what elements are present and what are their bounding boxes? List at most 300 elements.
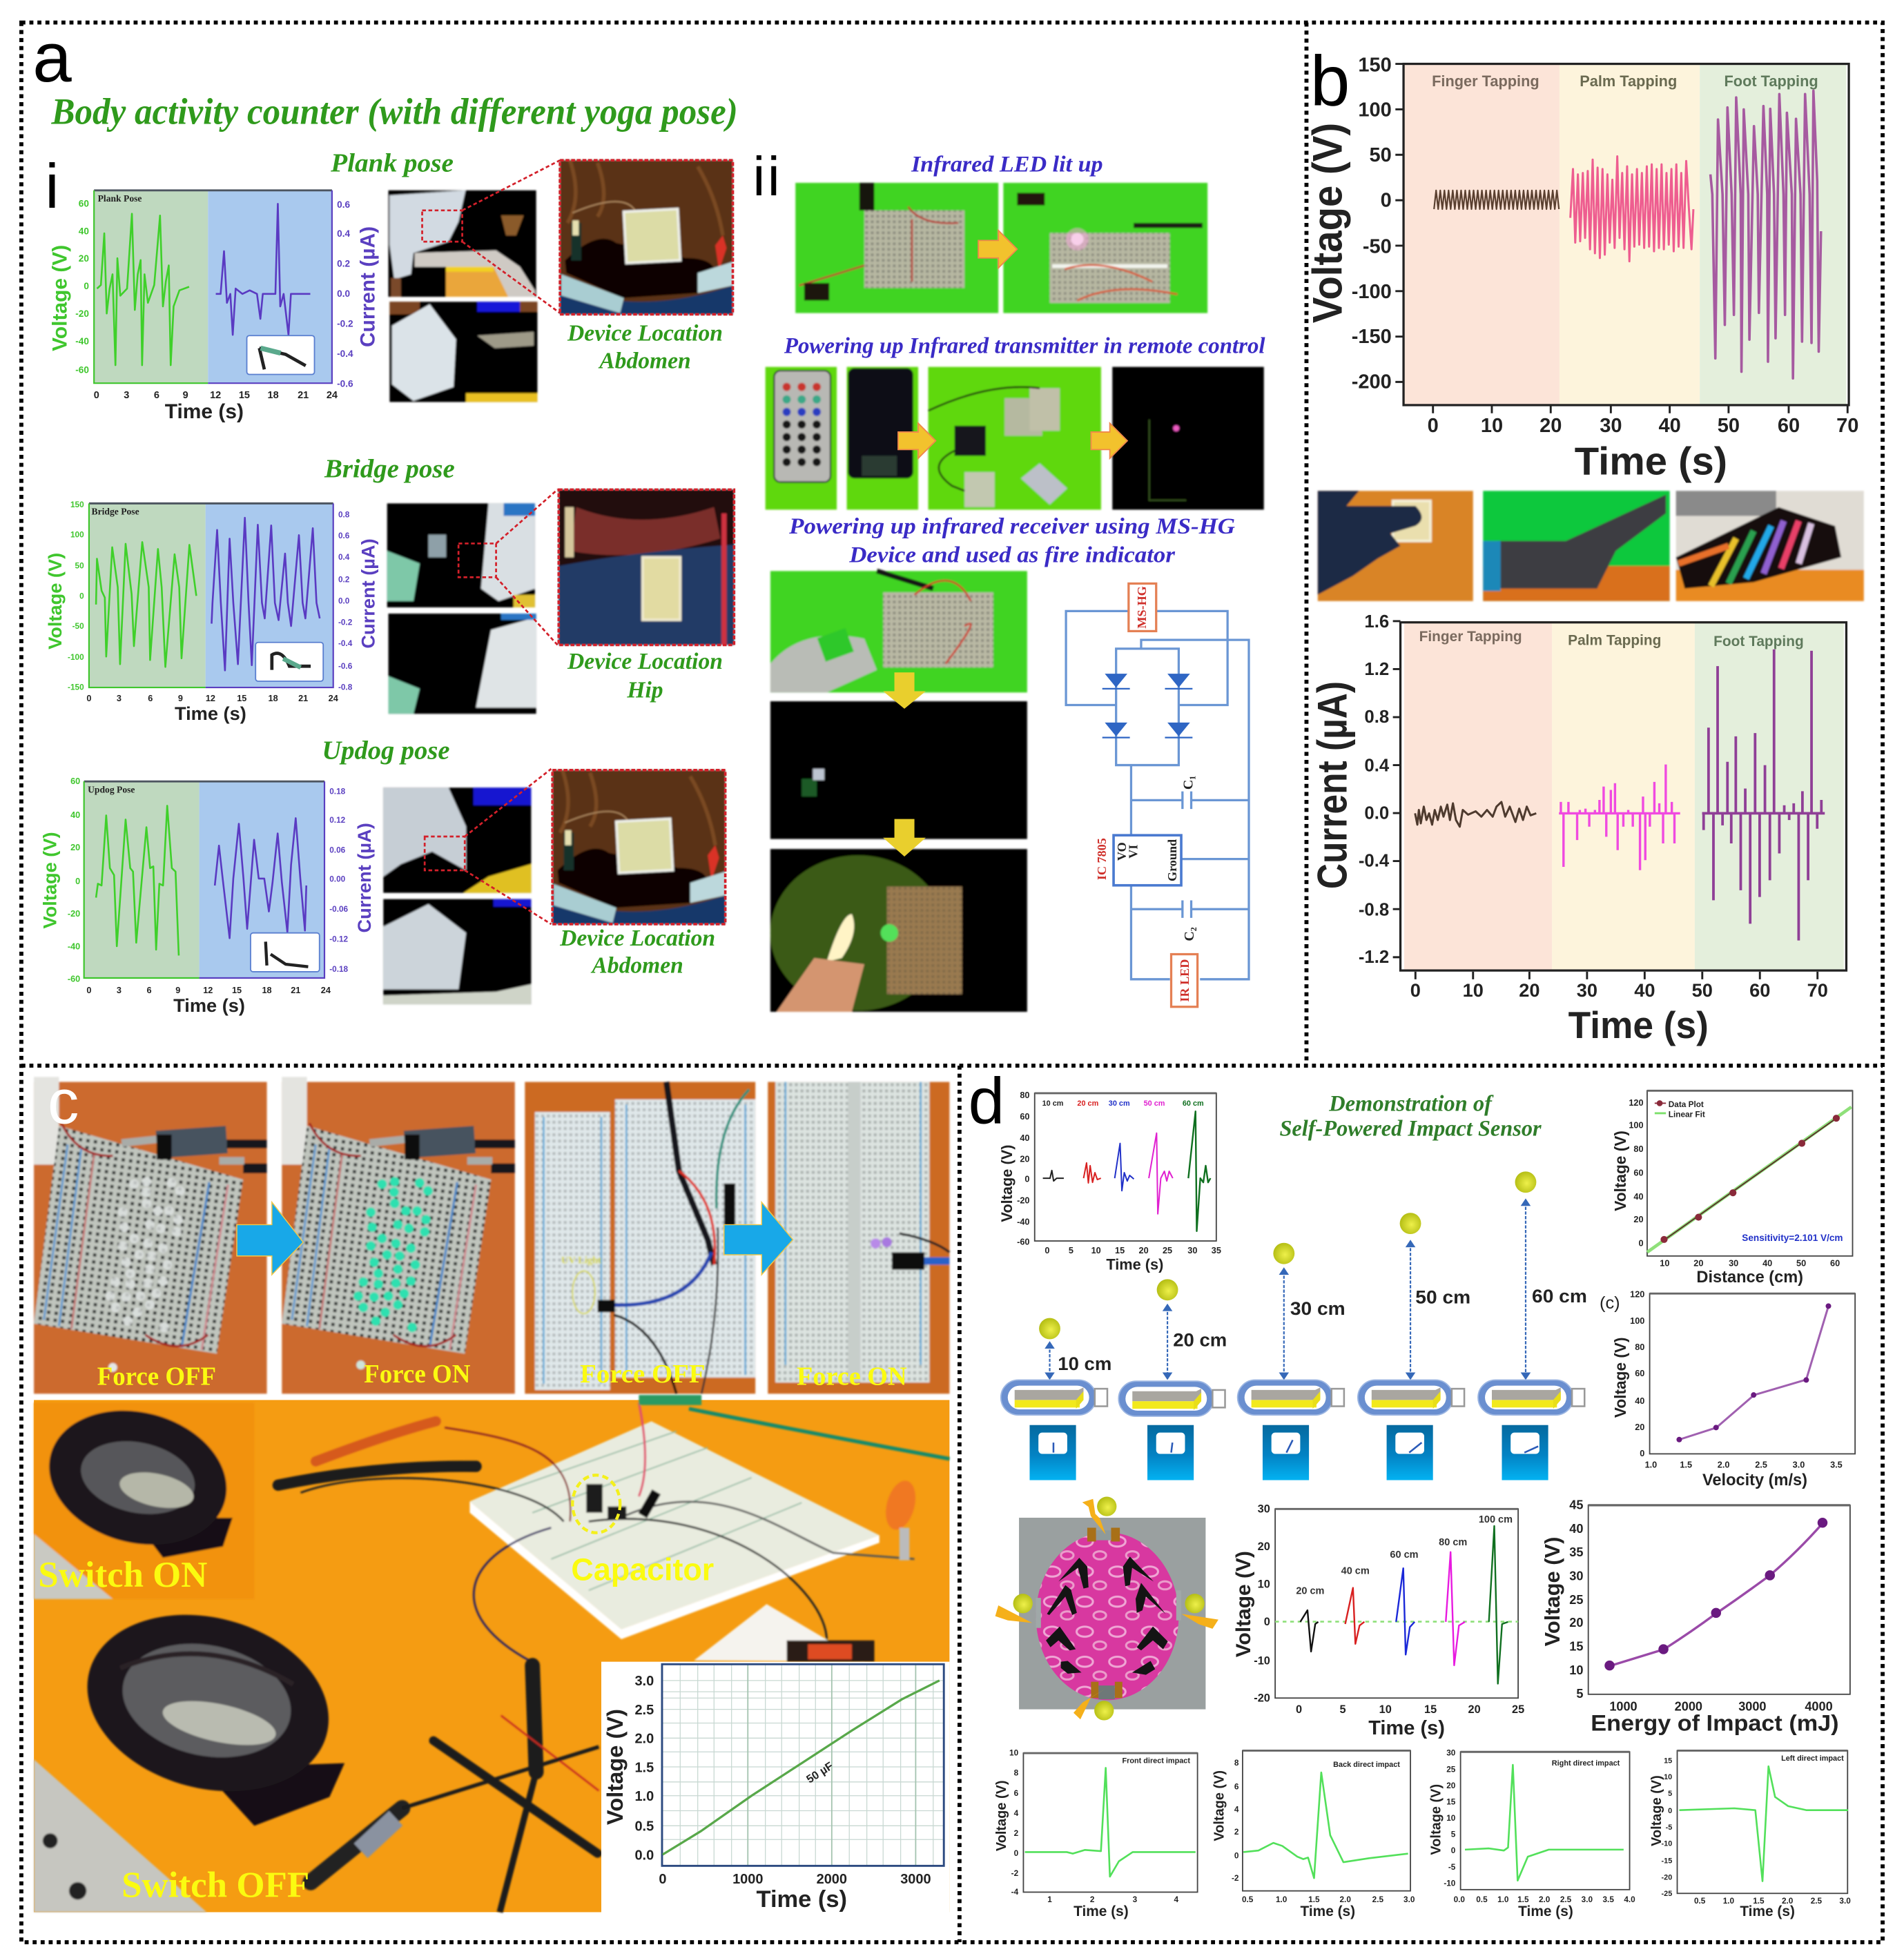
bridge photos	[387, 503, 536, 714]
distance voltage chart: Linear Fit	[1669, 1110, 1705, 1119]
updog chart: -0.06	[329, 905, 349, 914]
distance voltage chart: Distance (cm)	[1696, 1268, 1803, 1286]
impact balls	[1013, 1496, 1205, 1721]
bridge chart: -0.2	[338, 618, 353, 627]
plank photos	[389, 190, 537, 402]
drop voltage chart: 0	[1024, 1175, 1029, 1184]
plank chart: 15	[239, 390, 250, 401]
label a: a	[32, 18, 72, 97]
updog chart: 3	[117, 986, 122, 995]
updog chart: 0.06	[329, 846, 346, 855]
drop voltage chart: 20 cm	[1077, 1099, 1098, 1108]
updog chart: 0.00	[329, 874, 346, 883]
helmet drop chart: 10	[1379, 1703, 1392, 1716]
distance voltage chart: 80	[1633, 1144, 1644, 1154]
front impact chart: 1	[1047, 1895, 1052, 1904]
updog chart: 15	[232, 986, 242, 995]
helmet drop chart: 0	[1264, 1616, 1270, 1628]
distance voltage chart: Voltage (V)	[1611, 1131, 1629, 1211]
meters	[1029, 1425, 1548, 1480]
left impact chart: Voltage (V)	[1649, 1775, 1664, 1846]
back impact chart: 2.0	[1340, 1895, 1351, 1904]
plank heading: Plank pose	[330, 149, 454, 178]
front impact chart: 3	[1133, 1895, 1138, 1904]
helmet drop chart: 100 cm	[1479, 1514, 1513, 1525]
velocity voltage chart: 100	[1630, 1316, 1644, 1326]
front impact chart: Front direct impact	[1122, 1757, 1190, 1766]
drop voltage chart: 60 cm	[1183, 1099, 1204, 1108]
velocity voltage chart: 40	[1635, 1396, 1644, 1406]
drop voltage chart: -40	[1017, 1217, 1029, 1226]
circuit labels: Ground	[1165, 839, 1179, 881]
velocity voltage chart: 1.5	[1680, 1460, 1692, 1469]
height labels: 20 cm	[1173, 1329, 1227, 1350]
plank chart: 40	[79, 226, 89, 236]
tapping photos	[1318, 491, 1864, 601]
energy voltage chart: 20	[1569, 1616, 1583, 1630]
drop voltage chart: -20	[1017, 1196, 1029, 1206]
right impact chart: 2.5	[1560, 1895, 1572, 1904]
voltage chart: 100	[1358, 99, 1392, 121]
current chart: 10	[1463, 979, 1484, 1001]
plank chart: 9	[183, 390, 188, 401]
current chart: Time (s)	[1568, 1004, 1709, 1046]
force labels: Force ON	[364, 1360, 471, 1389]
ball 20 cm	[1157, 1279, 1178, 1300]
drop voltage chart: 80	[1020, 1091, 1029, 1100]
left impact chart: 5	[1668, 1790, 1672, 1798]
bridge chart: -0.8	[338, 683, 353, 692]
right impact chart: 5	[1451, 1830, 1456, 1839]
updog chart: 20	[70, 843, 80, 852]
plank chart: -40	[75, 336, 89, 346]
updog chart: 12	[203, 986, 213, 995]
heading: IR receiver: Powering up infrared receiver using MS-HG	[788, 514, 1235, 539]
current chart: 0.0	[1364, 804, 1389, 823]
height labels: 60 cm	[1532, 1285, 1587, 1307]
height labels: 30 cm	[1290, 1298, 1346, 1319]
back impact chart: 1.5	[1308, 1895, 1320, 1904]
plank chart: -20	[75, 309, 89, 319]
velocity voltage chart: 120	[1630, 1290, 1644, 1300]
back impact chart: 8	[1234, 1759, 1239, 1768]
bridge chart: 3	[117, 694, 122, 703]
energy voltage chart: 15	[1569, 1639, 1583, 1653]
force labels	[97, 1360, 907, 1391]
velocity voltage chart: 80	[1635, 1342, 1644, 1352]
updog chart: Updog Pose	[88, 784, 135, 794]
heading: IR transmitter: Powering up Infrared transmitter in remote control	[784, 334, 1266, 359]
plank chart: 3	[124, 390, 129, 401]
updog chart: 24	[321, 986, 331, 995]
height labels: 50 cm	[1415, 1287, 1470, 1308]
bridge chart: 9	[178, 694, 183, 703]
bridge chart	[44, 500, 379, 724]
plank pose row	[48, 149, 732, 423]
distance voltage chart: 60	[1633, 1168, 1644, 1178]
energy voltage chart: 4000	[1805, 1699, 1833, 1713]
drop test schematic	[1001, 1171, 1587, 1480]
helmet drop chart: 25	[1512, 1703, 1524, 1716]
back impact chart: 6	[1234, 1783, 1239, 1792]
drop voltage chart: 60	[1020, 1112, 1029, 1122]
voltage chart: 50	[1718, 415, 1740, 437]
drop voltage chart: 30 cm	[1109, 1099, 1130, 1108]
voltage chart: -50	[1363, 235, 1392, 257]
circuit labels: VI	[1127, 845, 1140, 859]
left impact chart: Left direct impact	[1781, 1754, 1844, 1763]
drop voltage chart: 50 cm	[1144, 1099, 1165, 1108]
energy voltage chart: 25	[1569, 1593, 1583, 1607]
distance voltage chart: 0	[1638, 1238, 1644, 1248]
heading: IR receiver	[788, 514, 1235, 568]
heading	[1279, 1091, 1542, 1142]
updog heading: Updog pose	[322, 736, 450, 765]
updog chart: -40	[68, 941, 80, 951]
capacitor charging chart: 0.5	[634, 1819, 654, 1835]
heading: infrared LED: Infrared LED lit up	[911, 153, 1103, 177]
current chart: Finger Tapping	[1419, 629, 1522, 645]
photo: LEDs force on	[282, 1077, 515, 1393]
right impact chart: 2.0	[1539, 1895, 1551, 1904]
right impact chart: 4.0	[1624, 1895, 1635, 1904]
capacitor charging chart: Voltage (V)	[602, 1709, 628, 1825]
front impact chart: 4	[1174, 1895, 1178, 1904]
bridge zoom callout	[458, 489, 734, 645]
distance voltage chart: 20	[1693, 1258, 1703, 1268]
drop voltage chart: -60	[1017, 1237, 1029, 1246]
right impact chart: 1.0	[1497, 1895, 1509, 1904]
capacitor	[586, 1484, 603, 1513]
helmet drop chart: 5	[1340, 1703, 1346, 1716]
photo: UV light force off: UV Light	[561, 1255, 601, 1266]
bridge chart: -0.6	[338, 662, 353, 671]
plank chart: -0.2	[337, 319, 353, 329]
bridge chart: -150	[68, 683, 84, 692]
plank chart: 12	[210, 390, 221, 401]
distance voltage chart	[1611, 1091, 1853, 1286]
energy voltage chart: 1000	[1609, 1699, 1638, 1713]
velocity voltage chart: 20	[1635, 1422, 1644, 1432]
updog chart: 21	[291, 986, 300, 995]
helmet drop chart: 60 cm	[1390, 1549, 1419, 1561]
velocity voltage chart: 3.0	[1793, 1460, 1805, 1469]
plank chart: 0	[94, 390, 99, 401]
voltage chart: 70	[1836, 415, 1858, 437]
drop voltage chart: 20	[1139, 1246, 1149, 1255]
updog chart: 9	[175, 986, 180, 995]
distance voltage chart: 120	[1629, 1098, 1644, 1108]
label d: d	[969, 1064, 1004, 1137]
sub-panel ii: infrared demonstrations	[753, 146, 1266, 1012]
voltage chart: 60	[1778, 415, 1800, 437]
velocity voltage chart: Velocity (m/s)	[1702, 1471, 1807, 1489]
plank chart: Plank Pose	[98, 193, 142, 204]
plank chart: 0.2	[337, 258, 350, 268]
bridge chart: -0.4	[338, 639, 353, 648]
panel d: impact sensor	[969, 1064, 1855, 1919]
helmet drop chart: 15	[1424, 1703, 1437, 1716]
voltage chart: Finger Tapping	[1432, 72, 1539, 90]
updog chart: 18	[262, 986, 272, 995]
helmet drop chart: 30	[1258, 1503, 1270, 1516]
velocity voltage chart: (c)	[1600, 1293, 1620, 1313]
front impact chart: 10	[1009, 1749, 1019, 1758]
wires	[301, 1478, 564, 1521]
drop voltage chart: 10 cm	[1042, 1099, 1063, 1108]
helmet drop chart: Voltage (V)	[1232, 1551, 1255, 1657]
helmet drop chart	[1232, 1503, 1524, 1739]
back impact chart: Voltage (V)	[1212, 1770, 1227, 1841]
drop voltage chart: 35	[1212, 1246, 1221, 1255]
updog chart	[39, 776, 375, 1016]
plank device label: Device Location	[567, 321, 723, 346]
bridge chart: 150	[70, 500, 84, 509]
left impact chart: 1.0	[1723, 1897, 1735, 1906]
drop voltage chart: Time (s)	[1106, 1256, 1163, 1273]
front impact chart: 4	[1014, 1809, 1019, 1818]
force labels: Force OFF	[97, 1362, 216, 1391]
breadboard	[469, 1421, 880, 1629]
panel a: body activity counter	[32, 18, 1266, 1016]
updog zoom callout	[425, 769, 726, 924]
right impact chart: -5	[1448, 1863, 1456, 1872]
current chart: Palm Tapping	[1568, 632, 1661, 648]
plank chart: Time (s)	[165, 400, 244, 423]
right impact chart: 3.5	[1603, 1895, 1614, 1904]
voltage chart	[1304, 54, 1858, 483]
right impact chart: 0.5	[1476, 1895, 1488, 1904]
energy voltage chart: 30	[1569, 1569, 1583, 1583]
bridge device label	[567, 649, 723, 703]
plank device label: Abdomen	[598, 348, 691, 373]
plank chart: 6	[154, 390, 159, 401]
plank chart: 0	[84, 281, 89, 291]
switch off label: Switch OFF	[122, 1866, 309, 1906]
helmet drop chart: 20	[1468, 1703, 1481, 1716]
label i: i	[45, 152, 59, 222]
plank chart: 24	[327, 390, 338, 401]
helmet drop chart: 20 cm	[1296, 1586, 1324, 1597]
velocity voltage chart: 0	[1640, 1449, 1644, 1458]
current chart: -0.8	[1359, 900, 1389, 919]
bridge chart: Voltage (V)	[44, 553, 66, 649]
front impact chart	[994, 1749, 1198, 1919]
right impact chart	[1429, 1749, 1635, 1919]
current chart: Current (µA)	[1310, 681, 1356, 889]
capacitor label: Capacitor	[571, 1552, 714, 1587]
distance voltage chart: 50	[1796, 1258, 1806, 1268]
bridge chart: 21	[298, 694, 308, 703]
energy voltage chart: 3000	[1738, 1699, 1767, 1713]
voltage chart: Voltage (V)	[1304, 123, 1350, 323]
left impact chart: -10	[1662, 1839, 1672, 1848]
voltage chart: 0	[1428, 415, 1439, 437]
drop voltage chart: 0	[1045, 1246, 1049, 1255]
capacitor charging chart: 1.5	[634, 1760, 654, 1775]
label ii: ii	[753, 146, 782, 207]
plank chart: 18	[268, 390, 279, 401]
updog device label: Abdomen	[590, 953, 683, 979]
title: Body activity counter (with different yoga pose)	[51, 90, 738, 133]
right impact chart: Right direct impact	[1552, 1759, 1620, 1768]
left impact chart: -20	[1662, 1873, 1672, 1881]
back impact chart: 3.0	[1403, 1895, 1415, 1904]
updog chart: 0.18	[329, 787, 346, 796]
energy voltage chart: 40	[1569, 1522, 1583, 1536]
devices	[1001, 1380, 1584, 1416]
voltage chart: Palm Tapping	[1580, 72, 1677, 90]
front impact chart: 2	[1090, 1895, 1095, 1904]
capacitor charging chart: 1.0	[634, 1789, 654, 1804]
updog chart: 40	[70, 810, 80, 820]
plank chart: 20	[79, 253, 89, 264]
back impact chart: 1.0	[1276, 1895, 1288, 1904]
bridge chart: Current (µA)	[358, 538, 379, 649]
left impact chart: Time (s)	[1740, 1904, 1795, 1919]
current chart: 0.4	[1364, 756, 1390, 776]
distance voltage chart: 20	[1633, 1215, 1644, 1224]
voltage chart: 150	[1358, 54, 1392, 76]
back impact chart: -2	[1232, 1874, 1239, 1883]
heading: Demonstration of	[1328, 1091, 1494, 1116]
energy voltage chart: 5	[1576, 1687, 1583, 1701]
distance voltage chart: 10	[1660, 1258, 1669, 1268]
plank chart: 60	[79, 198, 89, 208]
bridge chart: 6	[148, 694, 153, 703]
current chart: 50	[1692, 979, 1713, 1001]
circuit diagram	[1066, 583, 1249, 1007]
front impact chart: 0	[1014, 1849, 1019, 1858]
right impact chart: 0	[1451, 1846, 1456, 1855]
arrows	[898, 423, 1127, 458]
voltage chart: -200	[1352, 371, 1392, 393]
left impact chart: 3.0	[1839, 1897, 1851, 1906]
energy voltage chart: 35	[1569, 1545, 1583, 1559]
ball 30 cm	[1273, 1243, 1294, 1264]
bridge chart: -50	[72, 622, 84, 631]
plank chart: -0.4	[337, 349, 353, 359]
heading: IR receiver: Device and used as fire indicator	[848, 543, 1175, 568]
right impact chart: -10	[1444, 1879, 1456, 1888]
impact bolts	[995, 1499, 1218, 1719]
photo: UV light force on	[768, 1082, 949, 1393]
plank chart: -0.6	[337, 379, 353, 389]
updog chart: Current (µA)	[353, 823, 375, 932]
current chart: -1.2	[1359, 948, 1389, 967]
circuit labels: C₁	[1181, 776, 1196, 790]
drop voltage chart: 20	[1020, 1155, 1029, 1164]
photo: UV light force off	[525, 1082, 755, 1393]
circuit labels	[1095, 586, 1197, 1002]
height arrows	[1045, 1198, 1531, 1380]
bridge device label: Hip	[626, 678, 663, 703]
bridge chart: 12	[206, 694, 215, 703]
right impact chart: Voltage (V)	[1429, 1784, 1444, 1855]
right impact chart: 1.5	[1517, 1895, 1529, 1904]
bridge chart: 0	[79, 591, 84, 600]
back impact chart	[1212, 1750, 1415, 1919]
height labels	[1058, 1285, 1587, 1374]
capacitor charging chart: 2000	[817, 1872, 847, 1887]
right impact chart: 15	[1446, 1797, 1456, 1806]
current chart	[1310, 612, 1846, 1046]
capacitor charging chart: 1000	[732, 1872, 763, 1887]
updog chart: 6	[146, 986, 152, 995]
alligator clips	[278, 1466, 476, 1485]
circuit labels: IR LED	[1178, 959, 1192, 1002]
helmet drop chart: 40 cm	[1341, 1566, 1370, 1577]
left impact chart: -15	[1662, 1857, 1672, 1866]
energy voltage chart: Voltage (V)	[1540, 1537, 1564, 1646]
left impact chart: 10	[1664, 1773, 1672, 1781]
energy voltage chart: 45	[1569, 1498, 1583, 1512]
bridge chart: 0.2	[338, 576, 350, 585]
current chart: 30	[1577, 979, 1597, 1001]
updog chart: Voltage (V)	[39, 832, 61, 929]
bridge chart: 15	[237, 694, 246, 703]
left impact chart: 0.5	[1694, 1897, 1706, 1906]
back impact chart: Back direct impact	[1333, 1761, 1400, 1769]
updog photos	[383, 788, 531, 1004]
drop voltage chart: 15	[1115, 1246, 1125, 1255]
drop voltage chart: Voltage (V)	[998, 1145, 1016, 1222]
current chart: -0.4	[1359, 852, 1390, 871]
photo: watch and capacitor circuit	[34, 1391, 949, 1912]
voltage chart: 10	[1481, 415, 1503, 437]
back impact chart: 2.5	[1372, 1895, 1384, 1904]
left impact chart: 2.5	[1811, 1897, 1823, 1906]
current chart: Foot Tapping	[1713, 634, 1804, 649]
back impact chart: 2	[1234, 1828, 1239, 1837]
panel b: tapping	[1304, 40, 1864, 1046]
helmet drop chart: 10	[1258, 1578, 1270, 1591]
front impact chart: Time (s)	[1074, 1904, 1129, 1919]
right impact chart: 3.0	[1582, 1895, 1593, 1904]
bridge heading: Bridge pose	[324, 454, 455, 483]
updog chart: 0	[86, 986, 91, 995]
helmet drop chart: 0	[1296, 1703, 1302, 1716]
helmet drop chart: 20	[1258, 1541, 1270, 1553]
force labels: Force ON	[797, 1362, 907, 1391]
updog chart: 60	[70, 776, 80, 786]
front impact chart: 6	[1014, 1789, 1019, 1798]
voltage chart: 0	[1381, 189, 1392, 211]
right impact chart: 30	[1446, 1749, 1456, 1758]
white box and switch	[694, 1604, 864, 1662]
plank chart: 21	[298, 390, 309, 401]
updog chart: -0.12	[329, 935, 349, 943]
photo: LEDs force off	[34, 1077, 267, 1393]
energy voltage chart	[1540, 1498, 1850, 1735]
capacitor charging chart: 3.0	[634, 1674, 654, 1689]
voltage chart: 30	[1600, 415, 1622, 437]
helmet drop chart: Time (s)	[1368, 1717, 1445, 1739]
bridge chart: 50	[75, 562, 84, 571]
helmet drop chart: 80 cm	[1439, 1537, 1467, 1548]
updog chart: -0.18	[329, 965, 349, 974]
current chart: 0.8	[1364, 707, 1389, 727]
current chart: 70	[1807, 979, 1828, 1001]
voltage chart: 40	[1658, 415, 1681, 437]
fire indicator photos	[770, 571, 1027, 1012]
plank chart: 0.0	[337, 288, 350, 299]
plank chart: Voltage (V)	[48, 245, 71, 351]
plank zoom callout	[422, 160, 732, 314]
front impact chart: Voltage (V)	[994, 1780, 1009, 1851]
updog device label	[559, 926, 715, 979]
capacitor charging chart: 2.5	[634, 1703, 654, 1718]
